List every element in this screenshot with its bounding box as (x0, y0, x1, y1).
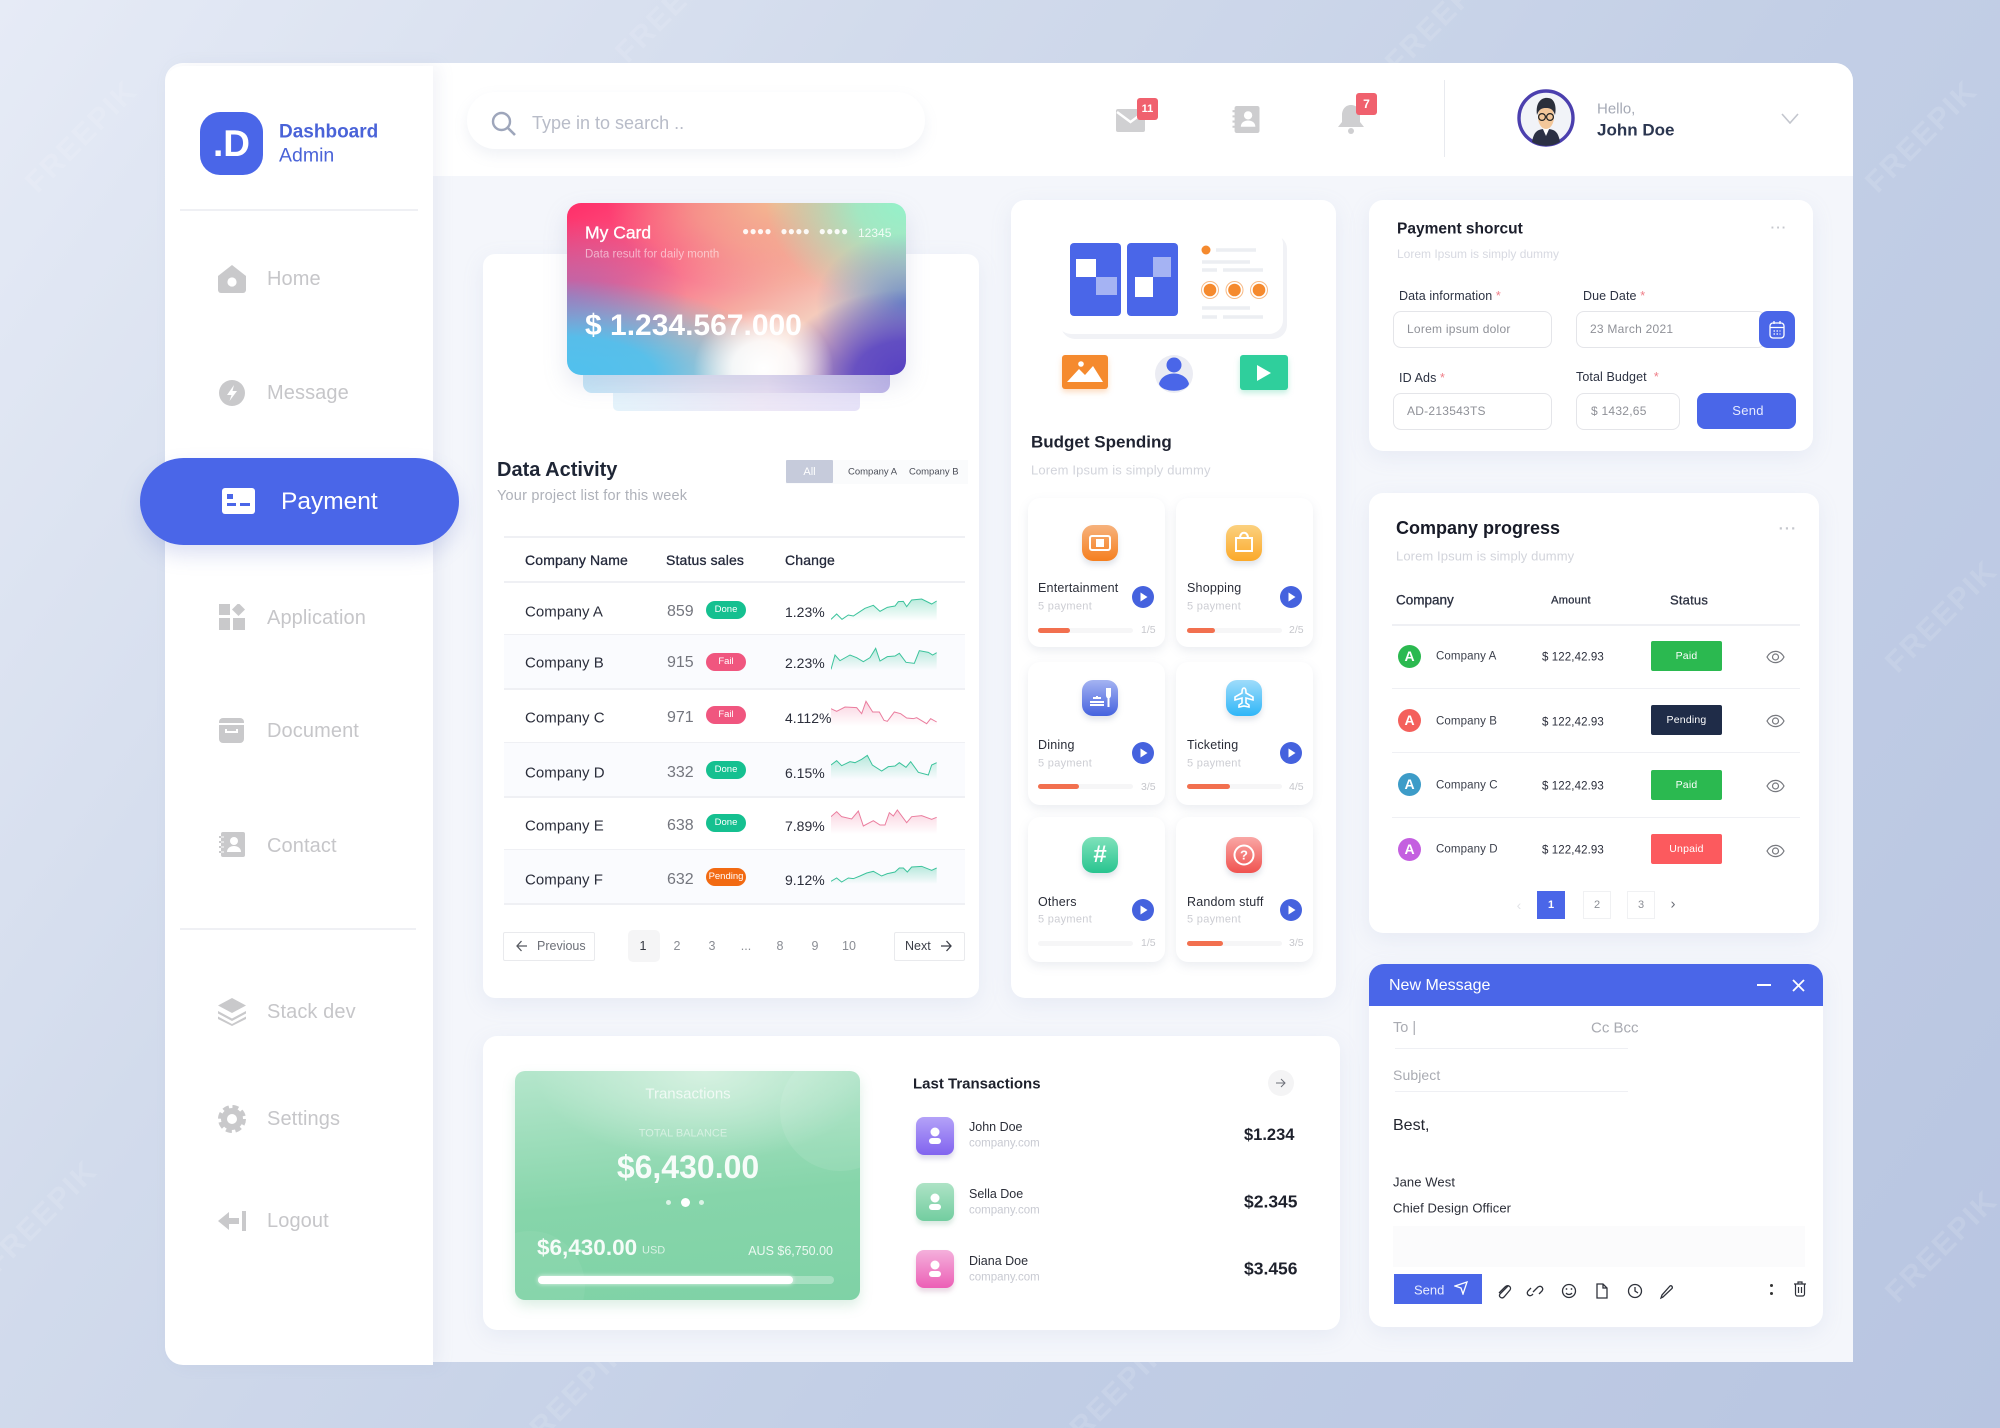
nav: document: Document (267, 720, 359, 742)
balance card: AUS $6,750.00 (748, 1244, 833, 1258)
nav: message (219, 380, 349, 406)
row: company d: Company D (525, 764, 605, 782)
field: id ads (1393, 371, 1552, 430)
field: total budget: $ 1432,65 (1591, 404, 1647, 418)
row: company c: 971 (667, 709, 694, 726)
row: company c (1398, 770, 1785, 800)
heading: Last Transactions (913, 1076, 1041, 1092)
category: others: Others (1038, 895, 1077, 909)
row: company d: 332 (667, 764, 694, 781)
category: ticketing: 5 payment (1187, 758, 1241, 770)
icon: mail with badge (1116, 98, 1158, 132)
pagination: ‹ (1517, 897, 1521, 913)
balance card: USD (642, 1244, 665, 1256)
row: company b: Pending (1667, 714, 1706, 726)
category: entertainment: 5 payment (1038, 600, 1092, 612)
search bar (467, 92, 925, 149)
category: random stuff: ? (1240, 848, 1248, 862)
row: company b: 2.23% (785, 655, 825, 671)
row: company e (525, 809, 937, 834)
subheading: Lorem Ipsum is simply dummy (1031, 462, 1211, 478)
heading: Company progress (1396, 518, 1560, 538)
row: company f: 9.12% (785, 872, 825, 888)
icon: image (1059, 355, 1111, 395)
subheading: Lorem Ipsum is simply dummy (1397, 247, 1559, 261)
pagination: 3 (709, 939, 715, 953)
pagination (503, 930, 965, 962)
table header (1396, 592, 1708, 608)
pagination: 9 (812, 939, 818, 953)
row: company b: $ 122,42.93 (1542, 716, 1604, 728)
category: shopping (1176, 498, 1313, 647)
panel: sidebar (165, 66, 433, 1365)
row: company b: Company B (1436, 715, 1497, 727)
category: random stuff: Random stuff (1187, 895, 1264, 909)
nav: logout (218, 1210, 329, 1232)
row: company f: Pending (709, 871, 743, 882)
background watermarks: FREEPIK (19, 74, 144, 199)
send button: Send (1732, 403, 1764, 418)
heading: Data Activity (497, 459, 617, 481)
category: dining: 3/5 (1141, 781, 1156, 793)
field: total budget (1576, 370, 1680, 430)
nav: stack dev: Stack dev (267, 1001, 356, 1023)
row: company b: Company B (525, 654, 604, 672)
more and trash (1770, 1281, 1806, 1297)
logo (200, 112, 263, 175)
send button (1697, 393, 1796, 429)
panel: data activity (483, 254, 979, 998)
pagination: › (1670, 896, 1676, 912)
row: company b (1398, 705, 1785, 735)
row: company d: Unpaid (1669, 843, 1704, 855)
heading: Payment shorcut (1397, 220, 1523, 237)
nav: contact: Contact (267, 835, 337, 857)
icon: bell with badge: 7 (1363, 97, 1370, 111)
my card: 12345 (858, 226, 891, 240)
balance card: $6,430.00 (537, 1235, 637, 1260)
table header (525, 552, 835, 568)
transaction: sella doe: Sella Doe (969, 1187, 1023, 1201)
category: random stuff: 5 payment (1187, 914, 1241, 926)
search bar: Type in to search .. (532, 113, 684, 133)
brand name: Admin (279, 144, 334, 166)
nav: home (218, 265, 321, 293)
icon: bell with badge (1338, 93, 1377, 134)
row: company d: A (1404, 841, 1415, 857)
nav: application (219, 604, 366, 630)
arrow button (1268, 1070, 1294, 1096)
panel: transactions (483, 1036, 1340, 1330)
transaction: diana doe: company.com (969, 1271, 1040, 1283)
category: random stuff: 3/5 (1289, 937, 1304, 949)
my card: ●●●● ●●●● ●●●● (742, 224, 848, 238)
table header: Company (1396, 592, 1454, 607)
row: company c: Company C (1436, 779, 1498, 791)
transaction: diana doe (914, 1250, 1298, 1294)
row: company a: 859 (667, 603, 694, 620)
transaction: john doe: $1.234 (1244, 1126, 1294, 1144)
table header: Change (785, 552, 835, 568)
row: company b: A (1404, 712, 1415, 728)
row: company e: 638 (667, 817, 694, 834)
nav: logout: Logout (267, 1210, 329, 1232)
dashboard main area (165, 63, 1853, 1362)
my card: $ 1.234.567.000 (585, 309, 802, 342)
message header: New Message (1389, 977, 1490, 994)
row: company e: 7.89% (785, 818, 825, 834)
category: shopping: 2/5 (1289, 624, 1304, 636)
category: others (1028, 817, 1165, 962)
field: due date (1576, 289, 1795, 348)
row: company d: $ 122,42.93 (1542, 844, 1604, 856)
category: others: 1/5 (1141, 937, 1156, 949)
nav: application: Application (267, 607, 366, 629)
user greeting (1597, 100, 1674, 140)
row: company a: 1.23% (785, 604, 825, 620)
field: due date: Due Date * (1583, 289, 1645, 303)
transaction: diana doe: Diana Doe (969, 1254, 1028, 1268)
transaction: john doe: company.com (969, 1137, 1040, 1149)
pagination: 10 (842, 939, 856, 953)
row: company f: Company F (525, 872, 603, 888)
category: shopping: Shopping (1187, 581, 1241, 595)
transaction: sella doe: company.com (969, 1204, 1040, 1216)
icon: chevron (1782, 114, 1798, 124)
balance card (515, 1071, 860, 1300)
row: company a (1398, 641, 1785, 671)
brand name: Dashboard (279, 122, 378, 142)
nav: settings: Settings (267, 1108, 340, 1130)
field: data information: Data information * (1399, 289, 1501, 303)
row: company a: $ 122,42.93 (1542, 651, 1604, 663)
row: company c: Fail (718, 709, 734, 720)
row: company d: 6.15% (785, 765, 825, 781)
row: company d (504, 743, 965, 796)
nav: home: Home (267, 268, 321, 290)
row: company a (525, 598, 937, 620)
panel: budget spending (1011, 200, 1336, 998)
row: company b (504, 635, 965, 688)
nav: payment active pill (140, 458, 459, 545)
background watermarks: FREEPIK (1859, 74, 1984, 199)
pagination: 2 (1594, 899, 1600, 911)
nav: message: Message (267, 382, 349, 404)
table header: Amount (1551, 594, 1591, 606)
category: ticketing: 4/5 (1289, 781, 1304, 793)
icon: contact book (1232, 106, 1260, 133)
field: data information (1393, 289, 1552, 348)
logo: .D (213, 123, 250, 164)
category: entertainment: Entertainment (1038, 581, 1118, 595)
send button (1394, 1274, 1482, 1304)
heading: Budget Spending (1031, 432, 1172, 452)
toolbar icons (1498, 1283, 1673, 1300)
row: company d: Company D (1436, 843, 1498, 855)
filter tabs: Company A (848, 466, 897, 477)
row: company c (525, 700, 937, 726)
balance card: TOTAL BALANCE (639, 1128, 727, 1140)
user greeting: Hello, (1597, 100, 1635, 118)
category: dining: Dining (1038, 738, 1075, 752)
category: random stuff (1176, 817, 1313, 962)
message body: Best, (1393, 1117, 1429, 1134)
illustration: dashboard mockup (1057, 230, 1283, 334)
field: total budget: Total Budget * (1576, 370, 1659, 384)
nav: contact (219, 832, 337, 857)
row: company c: A (1404, 776, 1415, 792)
transaction: sella doe: $2.345 (1244, 1191, 1298, 1211)
user greeting: John Doe (1597, 120, 1674, 140)
filter tabs: Company B (909, 466, 959, 477)
field: due date: 23 March 2021 (1590, 322, 1673, 336)
transaction: diana doe: $3.456 (1244, 1258, 1298, 1278)
nav: stack dev (218, 998, 356, 1026)
category: dining: 5 payment (1038, 758, 1092, 770)
filter tabs: All (803, 466, 816, 478)
panel: new message (1369, 964, 1823, 1327)
pagination: ... (741, 939, 751, 953)
my card: My Card (585, 222, 651, 242)
category: entertainment (1028, 498, 1165, 647)
pagination (1517, 891, 1676, 919)
subject field: Subject (1393, 1067, 1440, 1083)
transaction: john doe (914, 1117, 1294, 1160)
user avatar (1517, 89, 1575, 147)
nav: document (219, 718, 359, 743)
message body: Chief Design Officer (1393, 1200, 1511, 1216)
more dots: ... (1779, 516, 1797, 534)
field: id ads: ID Ads * (1399, 371, 1445, 385)
more dots: ... (1771, 216, 1787, 232)
nav: payment active pill: Payment (281, 488, 378, 515)
category: shopping: 5 payment (1187, 600, 1241, 612)
field: id ads: AD-213543TS (1407, 404, 1486, 418)
filter tabs (786, 460, 968, 484)
message body (1393, 1117, 1511, 1216)
field: data information: Lorem ipsum dolor (1407, 322, 1511, 336)
row: company e: Done (715, 817, 737, 828)
icon: mail with badge: 11 (1142, 103, 1153, 115)
subheading: Lorem Ipsum is simply dummy (1396, 548, 1574, 564)
row: company b: Fail (718, 656, 734, 667)
brand name (279, 122, 378, 166)
row: company a: Company A (525, 604, 603, 620)
row: company c: $ 122,42.93 (1542, 780, 1604, 792)
pagination: Previous (537, 939, 586, 953)
category: entertainment: 1/5 (1141, 624, 1156, 636)
balance card: Transactions (645, 1086, 731, 1102)
pagination: 2 (674, 939, 680, 953)
category: others: 5 payment (1038, 914, 1092, 926)
row: company a: A (1404, 648, 1415, 664)
subheading: Your project list for this week (497, 488, 687, 504)
row: company e: Company E (525, 818, 604, 834)
row: company a: Company A (1436, 650, 1496, 662)
pagination: 3 (1638, 899, 1644, 911)
my card: Data result for daily month (585, 248, 719, 260)
category: ticketing (1176, 662, 1313, 805)
pagination: 8 (777, 939, 783, 953)
message body: Jane West (1393, 1174, 1455, 1190)
row: company a: Paid (1676, 650, 1697, 662)
send button: Send (1414, 1282, 1444, 1298)
transaction: john doe: John Doe (969, 1120, 1023, 1134)
pagination: Next (905, 939, 931, 953)
table header: Company Name (525, 552, 628, 568)
icon: play (1237, 355, 1291, 396)
row: company f (504, 850, 965, 903)
table header: Status sales (666, 552, 744, 568)
to field: To | (1393, 1020, 1416, 1036)
my card (567, 203, 906, 375)
pagination: 1 (640, 939, 646, 953)
row: company d (1398, 834, 1785, 864)
row: company c: 4.112% (785, 710, 831, 726)
cc bcc: Cc Bcc (1591, 1020, 1639, 1036)
table header: Status (1670, 592, 1708, 608)
row: company b: 915 (667, 654, 694, 671)
transaction: sella doe (914, 1183, 1298, 1226)
row: company c: Company C (525, 710, 605, 726)
icon: person (1155, 355, 1193, 393)
stacked card layers (583, 375, 890, 411)
category: dining (1028, 662, 1165, 805)
category: ticketing: Ticketing (1187, 738, 1238, 752)
row: company a: Done (715, 604, 737, 615)
balance card: $6,430.00 (617, 1149, 759, 1185)
row: company f: 632 (667, 871, 694, 888)
category: others: # (1093, 841, 1107, 868)
pagination: 1 (1548, 899, 1554, 911)
panel: company progress (1369, 493, 1819, 933)
row: company d: Done (715, 764, 737, 775)
panel: payment shortcut (1369, 200, 1813, 451)
nav: settings (218, 1105, 340, 1133)
row: company c: Paid (1676, 779, 1697, 791)
message header (1369, 964, 1823, 1006)
